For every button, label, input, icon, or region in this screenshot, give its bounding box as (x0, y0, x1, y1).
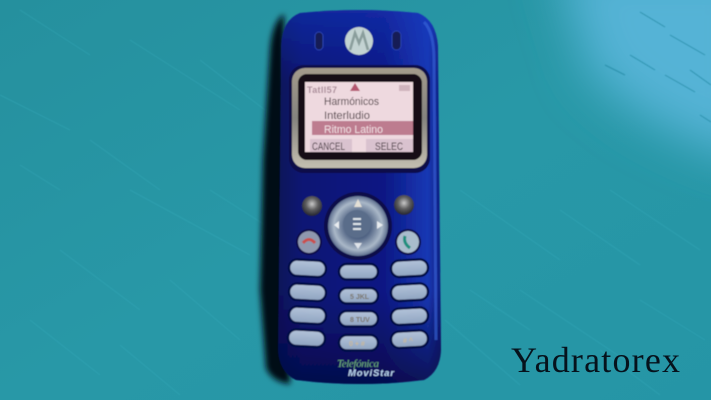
softkey CANCEL: CANCEL (312, 141, 345, 153)
selected menu item: Ritmo Latino (324, 124, 383, 136)
key legends: # ^ (403, 337, 413, 345)
left soft button (302, 196, 322, 216)
speaker slot right (392, 31, 401, 50)
status bar: Tatll57 (307, 85, 337, 95)
LCD panel (305, 82, 413, 152)
carrier logo (337, 358, 395, 379)
arrow up (354, 199, 362, 207)
screen (289, 65, 430, 173)
right soft button (394, 195, 414, 215)
end call button (296, 229, 322, 255)
arrow down (354, 243, 362, 249)
softkey SELEC (366, 139, 413, 153)
key legends: 0 + # (349, 341, 365, 348)
phone shadow (260, 14, 290, 384)
arrow right (377, 221, 383, 229)
keypad (288, 259, 428, 350)
key legends: 5 JKL (350, 294, 370, 301)
watermark: Yadratorex: Yadratorex (511, 340, 680, 380)
MoviStar wordmark: MoviStar (348, 368, 395, 379)
speaker slot left (315, 32, 323, 50)
key legends: 8 TUV (350, 317, 370, 324)
navigation pad (324, 192, 392, 260)
Telefónica wordmark: Telefónica (337, 358, 380, 370)
screen bezel (292, 68, 427, 168)
arrow left (334, 221, 339, 229)
send call button (395, 229, 421, 255)
black surround (298, 74, 422, 160)
menu item 2: Interludio (324, 110, 370, 122)
selected menu item (312, 121, 413, 136)
softkey SELEC: SELEC (375, 141, 403, 153)
dark screen recess (289, 65, 430, 173)
icon: Motorola logo (345, 27, 373, 55)
phone (278, 10, 441, 384)
status bar (307, 83, 410, 95)
key legends (349, 294, 413, 348)
menu item 1: Harmónicos (324, 96, 379, 108)
phone body (278, 10, 441, 384)
